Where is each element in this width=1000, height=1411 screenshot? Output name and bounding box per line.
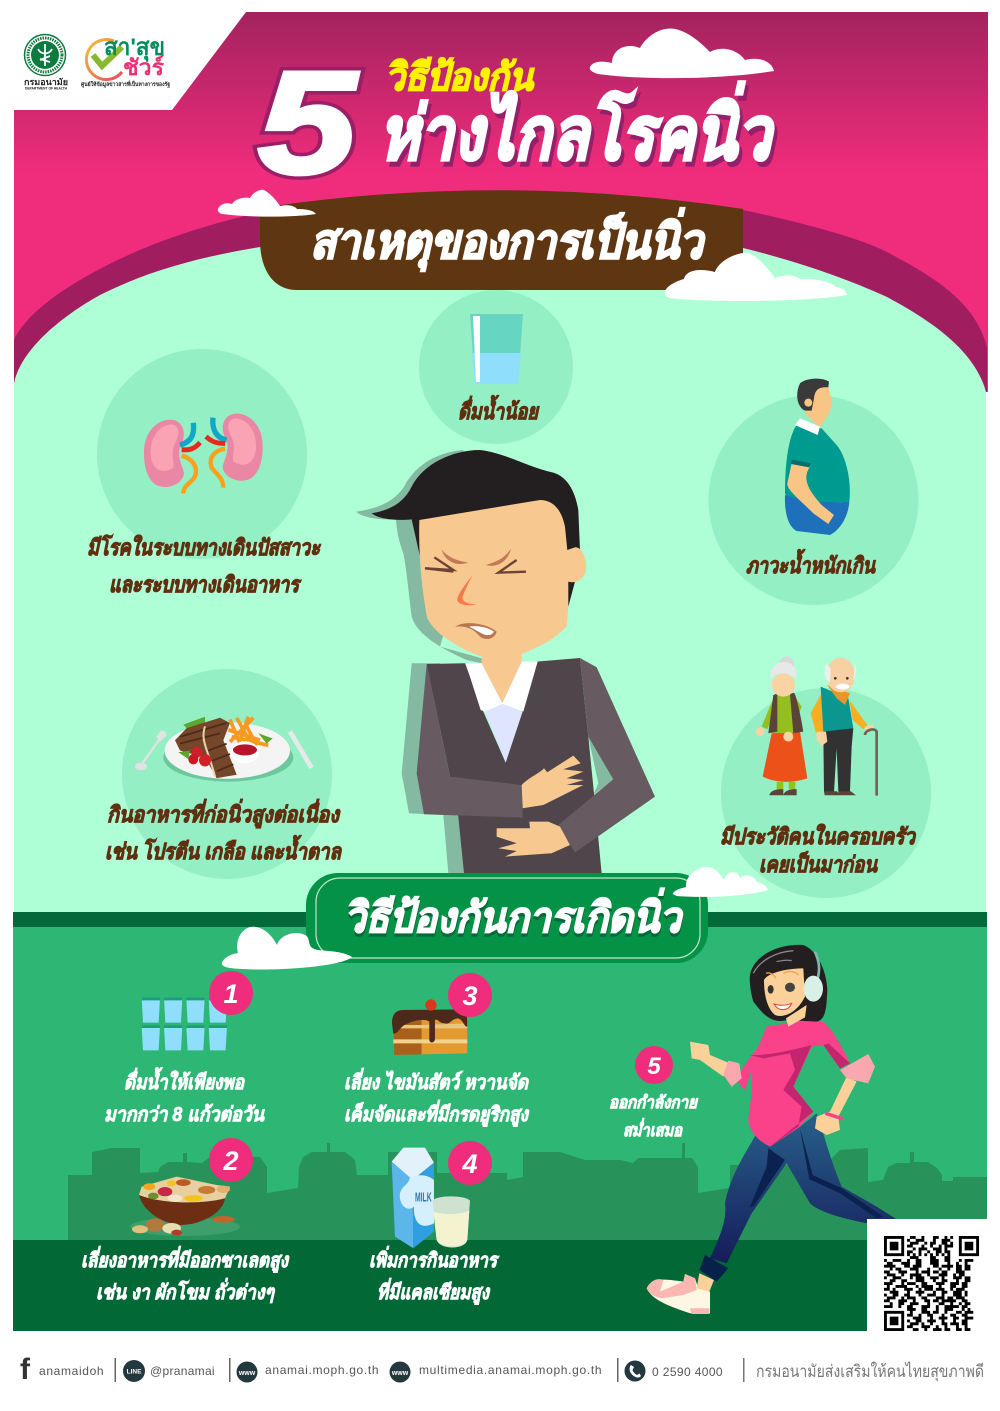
jogger cuff <box>699 1255 728 1282</box>
man shirt and neck <box>466 653 538 763</box>
QR modules <box>884 1237 973 1330</box>
title: number 5: 5 <box>258 41 358 204</box>
QR code <box>867 1219 1000 1331</box>
footer: phone <box>624 1360 723 1382</box>
footer: facebook <box>20 1353 104 1386</box>
prevention 5: exercise: สม่ำเสมอ <box>623 1118 684 1140</box>
heading: prevention pill: วิธีป้องกันการเกิดนิ่ว <box>344 891 683 944</box>
cloud: heading right <box>665 253 847 301</box>
title: number 5 outline: 5 <box>258 41 358 204</box>
prevention 4: more calcium: 4 <box>461 1149 478 1179</box>
illustration: man with stomach ache <box>356 450 655 873</box>
prevention 2: avoid oxalate <box>81 1138 290 1304</box>
prevention 3: avoid fatty food: เลี่ยง ไขมันสัตว์ หวานจัด <box>344 1068 530 1094</box>
header: pink banner <box>14 12 988 392</box>
footer: website: www <box>238 1370 256 1377</box>
footer: website: anamai.moph.go.th <box>265 1363 379 1377</box>
icon: kidneys <box>144 414 263 494</box>
logo: sa suk sure <box>81 34 170 89</box>
cause circle: little water: ดื่มน้ำน้อย <box>458 395 540 424</box>
ground strip <box>13 1240 987 1331</box>
cause circle: kidney disease: มีโรคในระบบทางเดินปัสสาวะ <box>87 534 321 560</box>
cloud: pill right <box>673 867 768 897</box>
cause circle: little water <box>419 290 573 444</box>
prevention 3: avoid fatty food: เค็มจัดและที่มีกรดยูริกสูง <box>344 1100 530 1127</box>
prevention 4: more calcium <box>369 1141 500 1305</box>
cause circle: family history <box>720 657 931 898</box>
jogger jeans shade <box>750 1128 883 1218</box>
footer: website <box>236 1362 379 1382</box>
man head <box>372 450 586 659</box>
footer: line <box>123 1360 215 1382</box>
prevention 4: more calcium: เพิ่มการกินอาหาร <box>369 1246 500 1272</box>
prevention 1: drink water: มากกว่า 8 แก้วต่อวัน <box>104 1103 265 1126</box>
logo: department of health seal <box>24 34 68 90</box>
prevention 1: drink water: 1 <box>223 979 239 1009</box>
prevention 1: drink water: ดื่มน้ำให้เพียงพอ <box>124 1067 245 1094</box>
icon: nut bowl <box>130 1177 240 1236</box>
jogger headphones <box>804 952 823 1002</box>
QR finder patterns <box>884 1236 979 1331</box>
footer: line: @pranamai <box>150 1364 215 1378</box>
prevention 3: avoid fatty food <box>344 973 530 1127</box>
prevention 1: drink water <box>104 971 265 1126</box>
cause circle: stone-forming food <box>105 669 342 879</box>
panel: prevention green background <box>13 912 987 1331</box>
footer: phone: 0 2590 4000 <box>652 1365 723 1379</box>
footer: facebook: f <box>20 1353 31 1386</box>
footer: multimedia: multimedia.anamai.moph.go.th <box>419 1363 602 1377</box>
icon: milk carton and glass: MILK <box>415 1191 432 1205</box>
prevention 2: avoid oxalate: เลี่ยงอาหารที่มีออกซาเลตสูง <box>81 1246 290 1273</box>
cloud: heading left <box>218 190 316 217</box>
icon: eight glasses <box>142 998 227 1050</box>
footer: line: LINE <box>127 1368 142 1376</box>
prevention 2: avoid oxalate: 2 <box>222 1146 239 1176</box>
background: mint panel <box>14 226 986 920</box>
jogger hair back <box>750 945 827 1022</box>
footer contact bar <box>20 1353 984 1386</box>
logo: department of health seal: กรมอนามัย <box>24 77 68 87</box>
cause circle: kidney disease: และระบบทางเดินอาหาร <box>109 572 302 597</box>
icon: overweight man <box>785 379 850 535</box>
logo: sa suk sure: ชัวร์ <box>123 55 164 80</box>
jogger shirt shade <box>750 1043 850 1147</box>
footer: multimedia: www <box>391 1370 409 1377</box>
prevention 3: avoid fatty food: 3 <box>462 981 478 1011</box>
jogger shirt <box>735 1017 850 1147</box>
heading: causes panel: สาเหตุของการเป็นนิ่ว <box>310 207 706 272</box>
logos corner <box>24 34 170 90</box>
title: line one: วิธีป้องกัน <box>385 57 535 99</box>
illustration: jogging woman <box>647 945 913 1314</box>
prevention 5: exercise: 5 <box>647 1053 661 1080</box>
cause circle: family history: มีประวัติคนในครอบครัว <box>720 823 916 849</box>
title: line two: ห่างไกลโรคนิ่ว <box>379 81 775 175</box>
footer: multimedia <box>390 1362 602 1382</box>
cause circle: overweight <box>708 379 918 605</box>
icon: elderly couple <box>756 657 877 796</box>
icon: milk carton and glass <box>392 1148 470 1248</box>
header arc: purple band <box>14 191 987 392</box>
logo: sa suk sure: สา'สุข <box>104 34 165 63</box>
title <box>258 41 778 204</box>
logo: sa suk sure: ศูนย์ให้ข้อมูลข่าวสารที่เป็นทางการของรัฐ <box>81 80 170 89</box>
man left arm <box>417 664 523 818</box>
jogger face <box>764 968 805 1016</box>
jogger shoe <box>647 1274 710 1314</box>
footer: facebook: anamaidoh <box>39 1364 104 1378</box>
cause circle: kidney disease <box>87 349 321 597</box>
man right arm <box>558 658 655 853</box>
cloud: pill left <box>222 927 352 970</box>
prevention 5: exercise: ออกกำลังกาย <box>609 1093 699 1112</box>
prevention 2: avoid oxalate: เช่น งา ผักโขม ถั่วต่างๆ <box>96 1278 275 1304</box>
cause circle: stone-forming food: กินอาหารที่ก่อนิ่วสูงต่อเนื่อง <box>107 798 341 829</box>
heading: prevention pill <box>306 873 708 963</box>
cloud: title top right <box>590 29 774 78</box>
heading: causes panel <box>260 190 743 290</box>
prevention 4: more calcium: ที่มีแคลเซียมสูง <box>377 1278 491 1305</box>
icon: water glass <box>470 314 523 384</box>
heading: prevention pill: วิธีป้องกันการเกิดนิ่ว <box>344 888 683 941</box>
title: line two shadow: ห่างไกลโรคนิ่ว <box>382 86 778 180</box>
jogger jeans <box>710 1113 913 1263</box>
man jacket <box>427 658 602 873</box>
cause circle: family history: เคยเป็นมาก่อน <box>759 851 878 877</box>
man hands <box>497 756 584 857</box>
prevention 5: exercise <box>609 1046 699 1140</box>
cause circle: stone-forming food: เช่น โปรตีน เกลือ และน้ำตาล <box>105 835 342 864</box>
icon: cake <box>392 999 467 1055</box>
logo: department of health seal: DEPARTMENT OF HEALTH <box>25 86 67 90</box>
jogger arms <box>690 1042 857 1135</box>
city skyline silhouette <box>68 1143 987 1240</box>
man shadow <box>356 450 614 873</box>
cause circle: overweight: ภาวะน้ำหนักเกิน <box>746 549 876 578</box>
jogger ankle <box>697 1273 714 1292</box>
icon: steak plate <box>135 717 312 782</box>
jogger sleeve cuffs <box>723 1054 875 1087</box>
